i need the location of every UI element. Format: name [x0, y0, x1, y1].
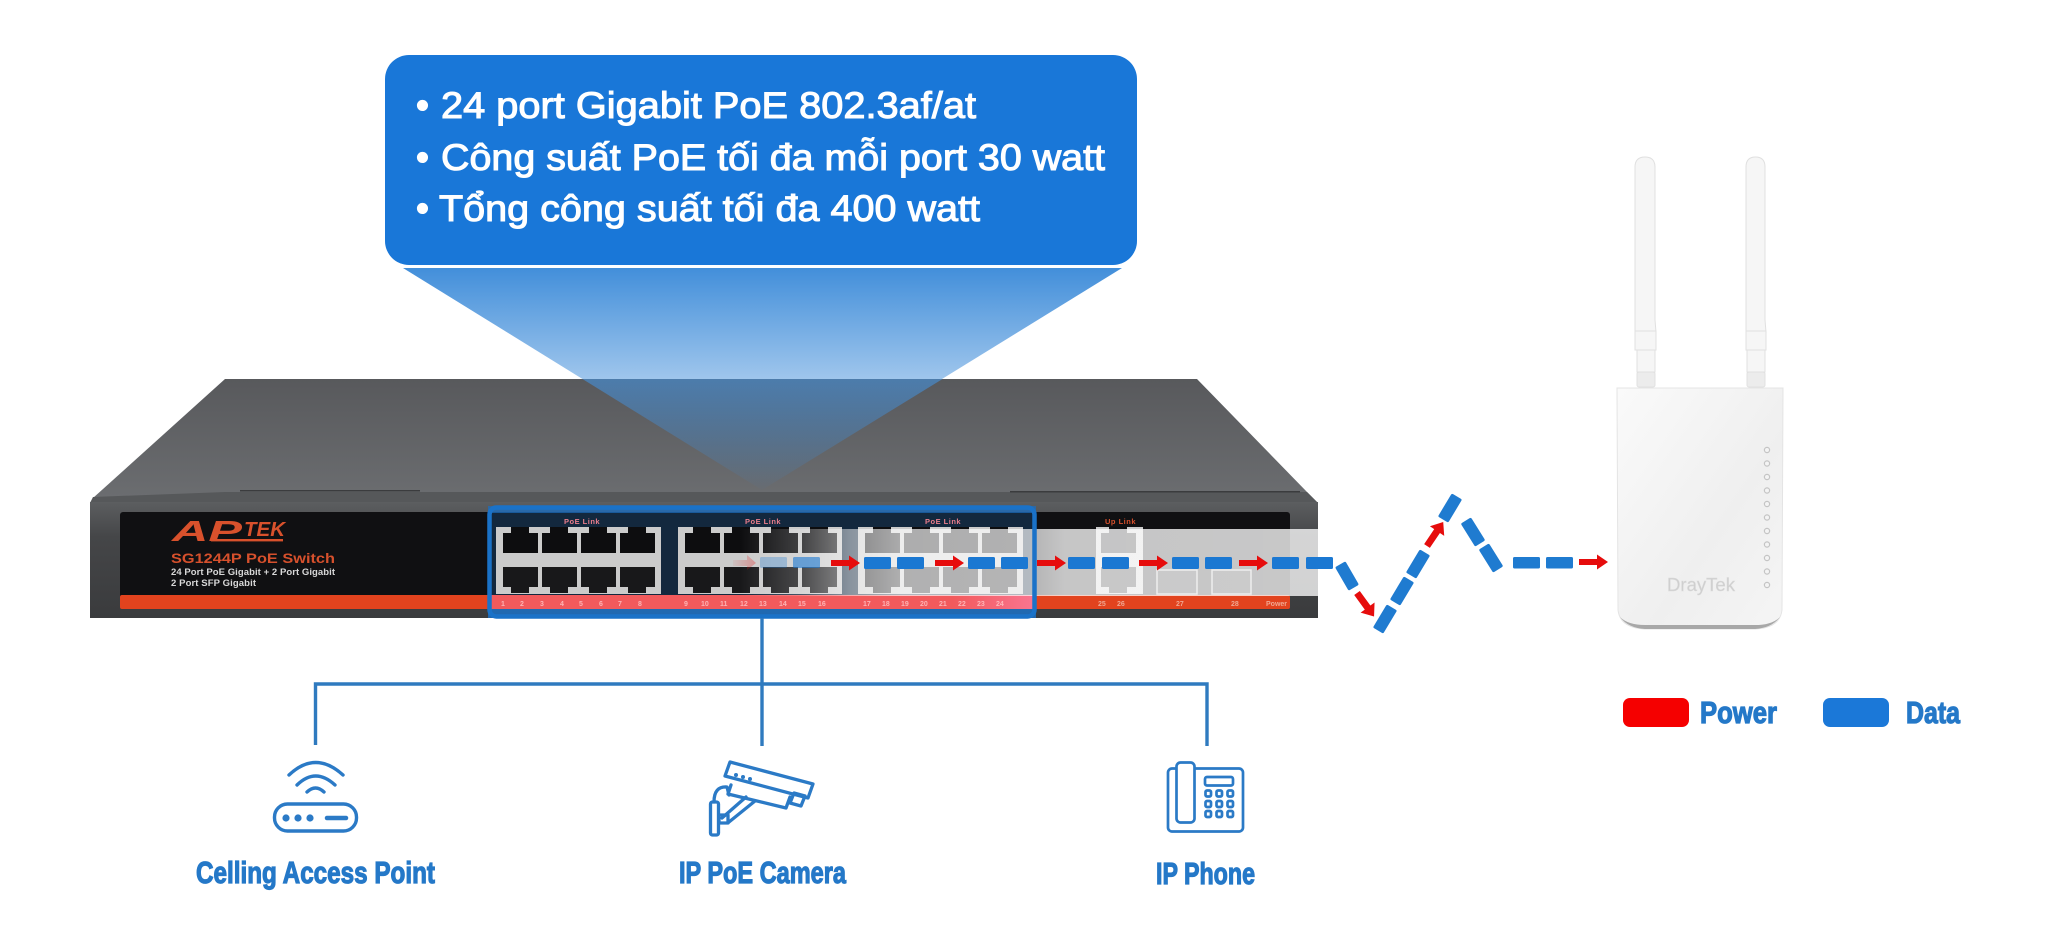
port numbers: 27	[1176, 601, 1184, 608]
model description	[171, 567, 336, 589]
port numbers: 21	[939, 601, 947, 608]
label: ceiling access point: Celling Access Point	[196, 855, 435, 890]
port numbers: 15	[798, 601, 806, 608]
label: IP phone: IP Phone	[1156, 856, 1255, 891]
model description: 24 Port PoE Gigabit + 2 Port Gigabit	[171, 567, 336, 578]
callout text	[416, 85, 1106, 229]
path across switch	[760, 557, 1333, 569]
link labels: Up Link	[1105, 517, 1136, 526]
port block 9-16	[678, 527, 842, 594]
port numbers: 28	[1231, 601, 1239, 608]
legend	[1623, 695, 1961, 730]
port numbers: 11	[720, 601, 728, 608]
link labels: PoE Link	[564, 517, 600, 526]
switch front panel	[90, 502, 1318, 618]
model description: 2 Port SFP Gigabit	[171, 578, 257, 589]
port numbers: 14	[779, 601, 787, 608]
brand logo	[170, 516, 287, 548]
callout text: Tổng công suất tối đa 400 watt	[439, 188, 981, 229]
callout box	[385, 55, 1137, 265]
SFP ports	[1157, 570, 1251, 594]
callout text: •	[416, 137, 429, 178]
label: IP camera: IP PoE Camera	[679, 855, 847, 890]
switch top cover	[90, 379, 1318, 503]
port highlight frame	[490, 508, 1034, 616]
port numbers: 16	[818, 601, 826, 608]
callout text: Công suất PoE tối đa mỗi port 30 watt	[441, 137, 1106, 178]
link labels	[564, 517, 1136, 526]
port numbers: 24	[996, 601, 1004, 608]
legend swatch: power	[1623, 698, 1689, 727]
port numbers: 17	[863, 601, 871, 608]
port numbers: 13	[759, 601, 767, 608]
port numbers: 1	[501, 601, 505, 608]
wireless zigzag dashes	[1335, 493, 1573, 634]
model name: SG1244P PoE Switch	[171, 550, 335, 566]
port numbers: 22	[958, 601, 966, 608]
port numbers: 25	[1098, 601, 1106, 608]
callout text: •	[416, 188, 429, 229]
callout beam over switch	[582, 379, 942, 490]
pink port strip	[490, 595, 1034, 609]
router brand: DrayTek	[1667, 575, 1736, 595]
callout beam	[403, 268, 1122, 490]
port block 1-8	[496, 527, 661, 594]
port numbers: 8	[638, 601, 642, 608]
legend label: power: Power	[1700, 695, 1777, 730]
power arrows across switch	[733, 555, 1268, 570]
port numbers: 23	[977, 601, 985, 608]
network switch	[90, 379, 1319, 618]
port highlight fill	[488, 506, 1036, 618]
port numbers: 20	[920, 601, 928, 608]
port numbers: 9	[684, 601, 688, 608]
legend label: data: Data	[1906, 695, 1961, 730]
link labels: PoE Link	[745, 517, 781, 526]
link labels: PoE Link	[925, 517, 961, 526]
router LEDs	[1764, 447, 1770, 588]
orange strip	[120, 595, 1290, 609]
port numbers: 4	[560, 601, 564, 608]
black face	[120, 512, 1290, 609]
icon: ceiling access point	[274, 762, 356, 831]
port numbers: 5	[579, 601, 583, 608]
port numbers: 12	[740, 601, 748, 608]
port numbers: 3	[540, 601, 544, 608]
light band over ports	[740, 529, 1319, 596]
port numbers: 19	[901, 601, 909, 608]
icon: IP phone	[1168, 762, 1243, 832]
icon: IP camera	[710, 762, 813, 835]
port numbers: 7	[618, 601, 622, 608]
port numbers	[501, 601, 1287, 608]
port numbers: 6	[599, 601, 603, 608]
wireless access point	[1617, 157, 1783, 629]
brand logo: AP	[170, 516, 243, 548]
left antenna	[1635, 157, 1656, 387]
port numbers: 10	[701, 601, 709, 608]
legend swatch: data	[1823, 698, 1889, 727]
right antenna	[1746, 157, 1766, 387]
wireless zigzag arrows	[1350, 517, 1608, 622]
router body	[1617, 388, 1783, 629]
port numbers: 26	[1117, 601, 1125, 608]
port block 17-24	[858, 527, 1023, 594]
callout text: •	[416, 85, 429, 126]
connector lines	[316, 618, 1207, 746]
port numbers: 18	[882, 601, 890, 608]
brand logo: TEK	[244, 519, 287, 541]
port numbers: Power	[1266, 601, 1287, 608]
port numbers: 2	[520, 601, 524, 608]
uplink ports	[1096, 527, 1143, 594]
callout text: 24 port Gigabit PoE 802.3af/at	[441, 85, 977, 126]
data and power path	[733, 493, 1608, 634]
